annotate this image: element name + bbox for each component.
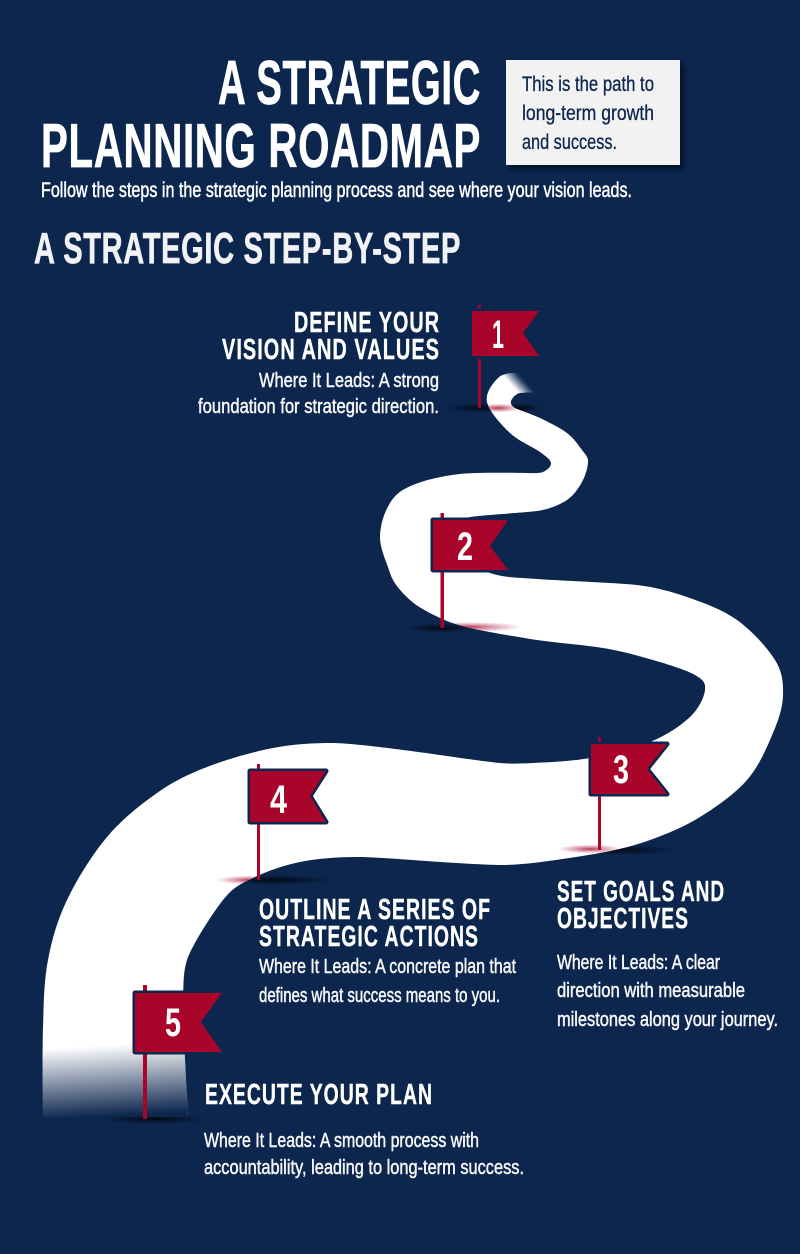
road fade at bottom xyxy=(42,1046,188,1117)
step 1 text: foundation for strategic direction. xyxy=(198,396,439,418)
ground shadows xyxy=(103,404,677,1124)
step 1 text xyxy=(198,307,440,418)
step 4 text: OUTLINE A SERIES OF xyxy=(259,894,491,926)
step 3 text: direction with measurable xyxy=(557,980,745,1002)
callout: path to growth xyxy=(506,60,684,169)
title: PLANNING ROADMAP xyxy=(41,112,481,181)
flag 1 xyxy=(472,305,539,408)
step 4 text xyxy=(259,894,516,1007)
step 4 text: defines what success means to you. xyxy=(259,985,500,1007)
flag 2: 2 xyxy=(457,525,473,569)
section heading: A STRATEGIC STEP-BY-STEP xyxy=(34,224,461,273)
step 3 text: OBJECTIVES xyxy=(557,903,689,935)
step 1 text: VISION AND VALUES xyxy=(222,334,440,366)
flag 5 xyxy=(135,985,222,1119)
winding road xyxy=(40,365,783,1120)
flag 4: 4 xyxy=(270,778,288,822)
red reflections on road xyxy=(216,404,622,884)
flag 4 xyxy=(250,764,326,880)
road fade at start xyxy=(504,373,533,393)
subtitle: Follow the steps in the strategic planning process and see where your vision leads. xyxy=(41,179,632,202)
step 5 text xyxy=(204,1079,524,1179)
flag 3 xyxy=(591,737,667,850)
title: A STRATEGIC xyxy=(218,49,481,118)
callout: path to growth: and success. xyxy=(522,131,617,154)
step 5 text: EXECUTE YOUR PLAN xyxy=(205,1079,433,1111)
step 5 text: Where It Leads: A smooth process with xyxy=(204,1130,479,1152)
title xyxy=(41,49,481,181)
flag 2 xyxy=(433,513,508,628)
step 1 text: DEFINE YOUR xyxy=(294,307,440,339)
callout: path to growth: This is the path to xyxy=(522,73,654,96)
step 4 text: Where It Leads: A concrete plan that xyxy=(259,956,516,978)
step 1 text: Where It Leads: A strong xyxy=(259,370,439,392)
flag 3: 3 xyxy=(613,748,629,792)
step 3 text xyxy=(557,876,778,1031)
flag 5: 5 xyxy=(165,1001,181,1045)
step 3 text: Where It Leads: A clear xyxy=(557,952,720,974)
step 5 text: accountability, leading to long-term success. xyxy=(204,1157,524,1179)
step 4 text: STRATEGIC ACTIONS xyxy=(259,921,479,953)
flag 1: 1 xyxy=(492,313,504,357)
callout: path to growth: long-term growth xyxy=(522,102,654,125)
